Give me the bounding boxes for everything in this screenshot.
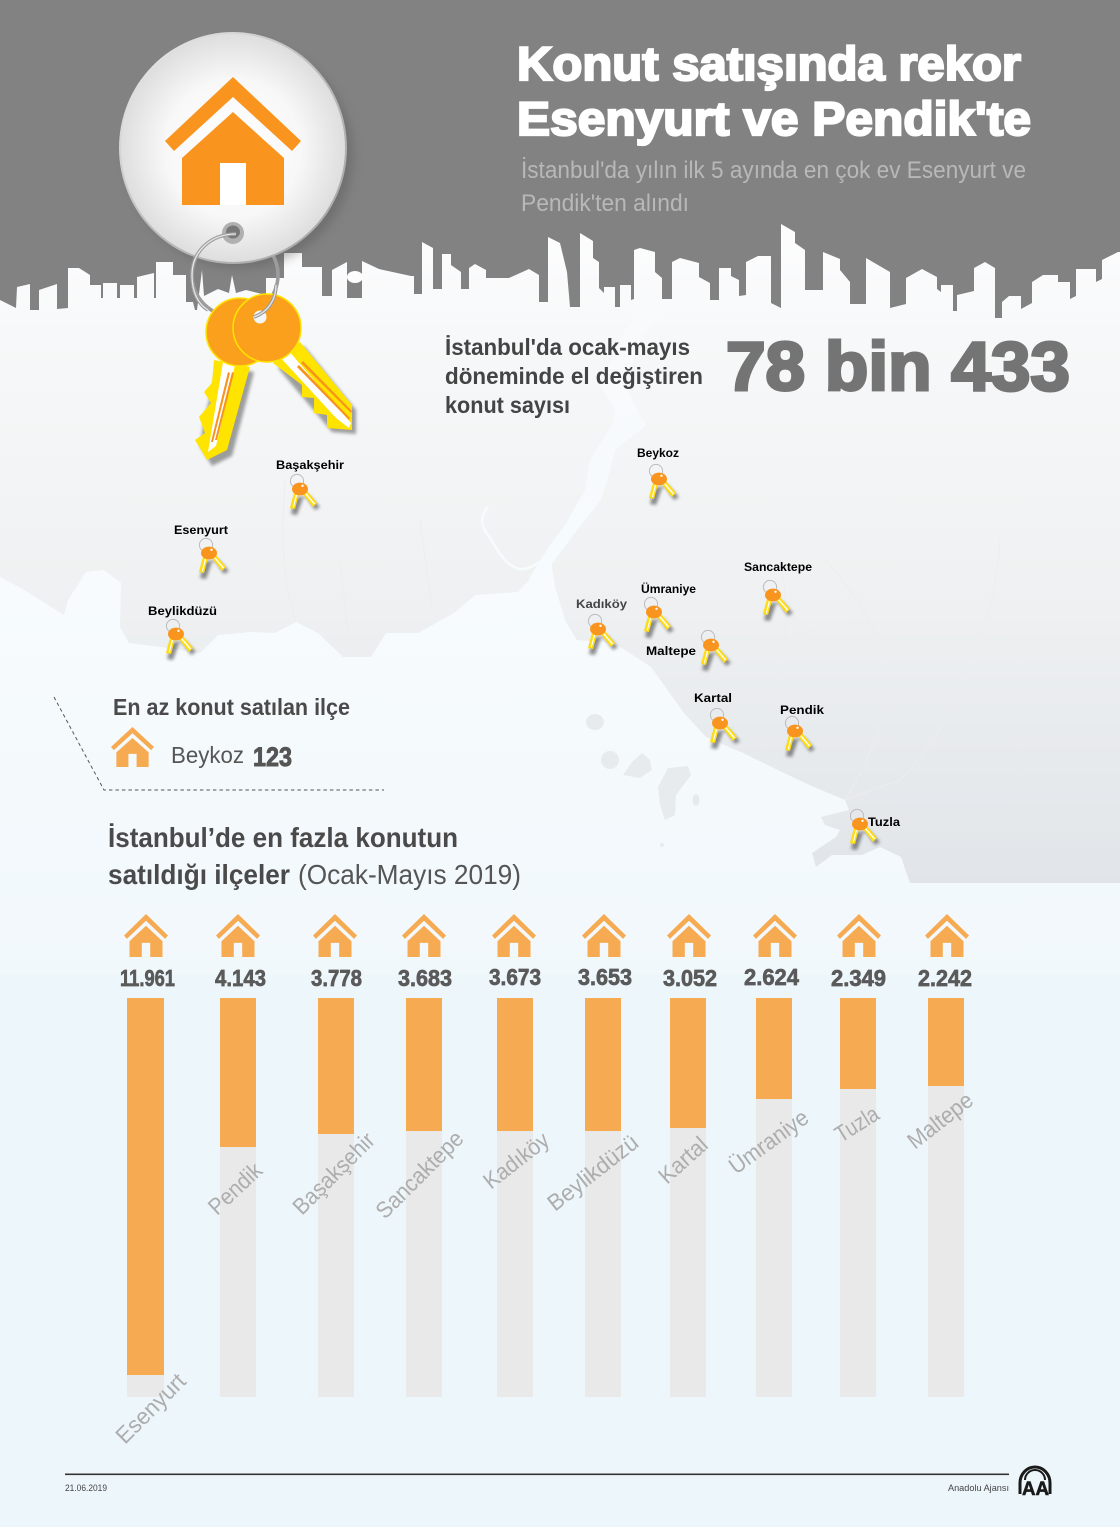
rotated district labels: Kartal: [653, 1131, 713, 1189]
map district labels: Beykoz: [637, 446, 679, 460]
map district labels: Başakşehir: [276, 458, 344, 472]
bar numbers: 3.778: [311, 965, 362, 991]
footer rule: [65, 1474, 1009, 1475]
bar values: [127, 998, 964, 1375]
key heads: [206, 298, 274, 366]
chart heading: İstanbul’de en fazla konutun: [108, 822, 458, 853]
bar numbers: [120, 964, 972, 991]
bar numbers: 4.143: [215, 965, 266, 991]
subtitle: İstanbul'da yılın ilk 5 ayında en çok ev Esenyurt ve: [521, 157, 1026, 184]
map district labels: Ümraniye: [641, 581, 696, 596]
map district labels: Tuzla: [868, 815, 900, 829]
bar numbers: 2.624: [744, 964, 799, 990]
rotated district labels: [110, 1087, 978, 1449]
land mass: [0, 220, 1120, 883]
map district labels: Kadıköy: [576, 597, 627, 611]
callout dashed leader: [54, 697, 384, 790]
key: left blade: [195, 360, 250, 460]
rotated district labels: Pendik: [203, 1157, 268, 1220]
bar chart: [110, 914, 978, 1449]
grey sky: [0, 0, 1120, 318]
total sales description: döneminde el değiştiren: [445, 363, 703, 389]
Princes' Islands: [586, 714, 700, 847]
subtitle: [521, 157, 1026, 217]
icons: houses above bars: [124, 914, 969, 957]
rotated district labels: Esenyurt: [110, 1368, 191, 1449]
Golden Horn: [482, 507, 548, 569]
total sales description: [445, 334, 703, 418]
bar numbers: 2.349: [831, 965, 886, 991]
icon: agency logo: AA: [1022, 1479, 1049, 1500]
total sales description: İstanbul'da ocak-mayıs: [445, 334, 690, 360]
bar numbers: 3.653: [578, 964, 632, 990]
bar numbers: 3.673: [489, 964, 541, 990]
rotated district labels: Kadıköy: [478, 1126, 554, 1194]
chart heading: satıldığı ilçeler: [108, 859, 290, 890]
footer: [65, 1467, 1050, 1500]
key ring, highlight: [192, 234, 276, 317]
map district labels: Esenyurt: [174, 523, 228, 537]
title: Esenyurt ve Pendik'te: [517, 92, 1031, 145]
total sales number: 78 bin 433: [726, 328, 1070, 405]
Bosphorus: [528, 305, 665, 580]
rotated district labels: Sancaktepe: [370, 1125, 468, 1224]
header with skyline: [0, 0, 1120, 318]
rotated district labels: Beylikdüzü: [542, 1129, 643, 1216]
total sales description: konut sayısı: [445, 392, 570, 418]
skyline dome: [347, 271, 363, 283]
rotated district labels: Maltepe: [902, 1087, 978, 1154]
icon: house on fob: [165, 77, 301, 205]
map district labels: Pendik: [780, 703, 824, 717]
map of Istanbul: [0, 220, 1120, 883]
chart heading: [108, 822, 521, 890]
map district labels: [148, 446, 900, 829]
date: 21.06.2019: [65, 1483, 107, 1494]
map district labels: Kartal: [694, 691, 732, 705]
callout district name: Beykoz: [171, 742, 244, 768]
key ring, rear part: [192, 233, 278, 317]
bar tracks: [127, 998, 964, 1397]
callout value: 123: [253, 742, 292, 772]
sea background: [0, 220, 1120, 975]
callout: least sold district: [54, 694, 384, 790]
subtitle: Pendik'ten alındı: [521, 190, 689, 217]
fob door: [220, 163, 246, 205]
map district labels: Beylikdüzü: [148, 604, 217, 618]
key: right blade: [273, 342, 352, 430]
key ring, front arcs: [192, 234, 276, 317]
map key markers: [166, 464, 880, 850]
key blade shadows: [200, 346, 356, 466]
rotated district labels: Ümraniye: [724, 1104, 813, 1179]
bar numbers: 3.052: [663, 965, 717, 991]
agency name: Anadolu Ajansı: [948, 1483, 1009, 1494]
map district labels: Maltepe: [646, 644, 696, 658]
bar numbers: 11.961: [120, 965, 175, 991]
icon: house: [111, 727, 154, 767]
map district labels: Sancaktepe: [744, 560, 812, 574]
rotated district labels: Tuzla: [830, 1100, 884, 1147]
rotated district labels: Başakşehir: [287, 1127, 380, 1220]
title: [517, 37, 1031, 145]
chart heading: (Ocak-Mayıs 2019): [298, 859, 521, 890]
bar numbers: 3.683: [398, 965, 452, 991]
fob hole: [222, 222, 244, 244]
district borders: [283, 480, 1000, 800]
fob shadow: [127, 42, 353, 268]
title: Konut satışında rekor: [517, 37, 1021, 90]
bar numbers: 2.242: [918, 965, 972, 991]
callout heading: En az konut satılan ilçe: [113, 694, 350, 720]
key fob: [119, 32, 347, 264]
keychain illustration: [119, 32, 356, 466]
icon: agency logo: [1020, 1467, 1050, 1500]
